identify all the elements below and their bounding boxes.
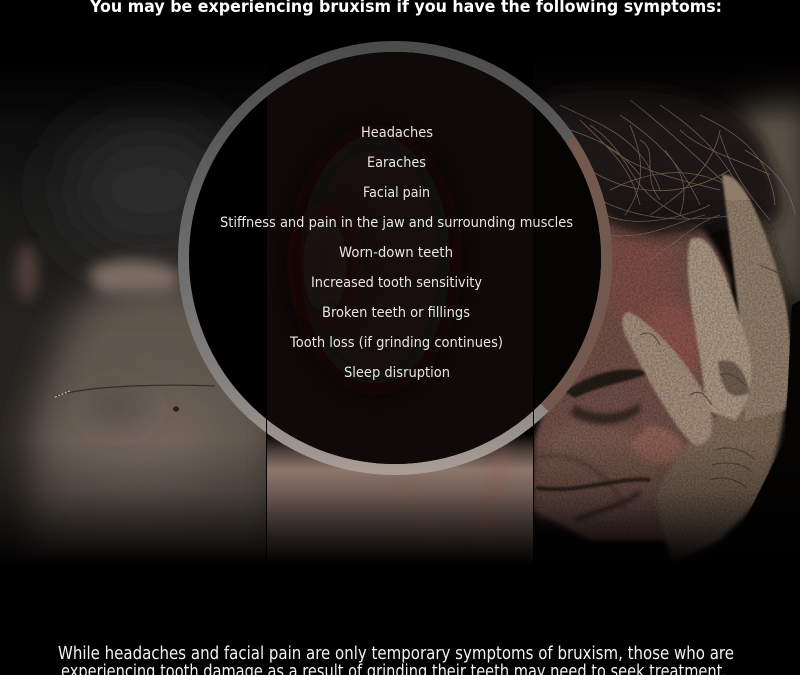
symptom list: Stiffness and pain in the jaw and surrounding muscles [220, 215, 573, 231]
symptom list [220, 125, 573, 381]
symptom list: Earaches [367, 155, 426, 171]
photo panel: man holding his head [534, 50, 800, 580]
symptom list: Increased tooth sensitivity [311, 275, 482, 291]
symptom list: Worn-down teeth [339, 245, 453, 261]
closing paragraph [58, 644, 734, 675]
dark sleeve [747, 300, 800, 516]
symptom list: Sleep disruption [344, 365, 450, 381]
photo panel: ear [267, 436, 533, 559]
symptom list: Headaches [361, 125, 433, 141]
panel divider lines [266, 380, 534, 565]
circle with dark interior [184, 46, 613, 470]
wall [730, 90, 800, 320]
symptom list: Broken teeth or fillings [322, 305, 470, 321]
hand [622, 175, 791, 564]
ear on neck photo [17, 244, 37, 300]
skin texture [534, 200, 796, 535]
eyebrow [565, 369, 652, 398]
face [534, 183, 730, 540]
closed eye [570, 402, 640, 424]
photo panel: back of neck [0, 93, 266, 558]
hair [540, 84, 795, 260]
necklace [55, 385, 215, 397]
mole [173, 406, 179, 412]
symptom list: Tooth loss (if grinding continues) [289, 335, 503, 351]
symptom list: Facial pain [363, 185, 430, 201]
